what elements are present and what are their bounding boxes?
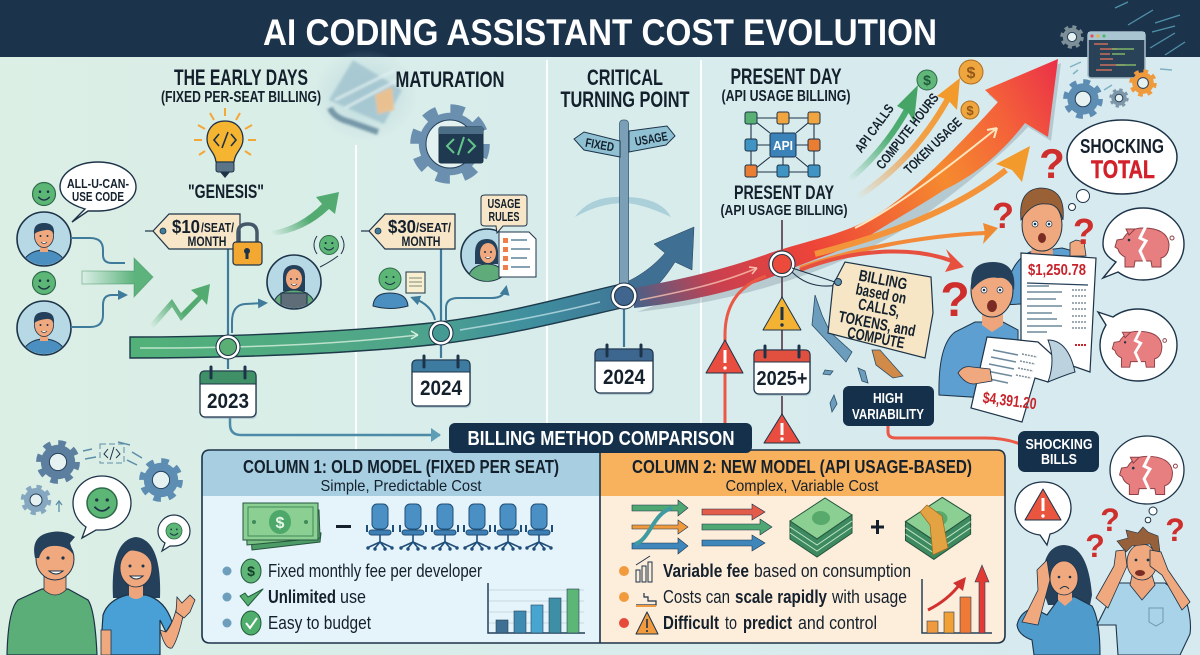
- bullet: scale rapidly: with usage: [831, 587, 907, 607]
- note: usage rules: RULES: [488, 210, 520, 224]
- bullet: unlimited use: [222, 587, 366, 607]
- bullet: scale rapidly: [619, 587, 907, 607]
- panel: billing comparison: [202, 450, 1005, 643]
- receipt: $4,391.20: $4,391.20: [982, 390, 1037, 413]
- bullet: difficult to predict: and control: [798, 613, 877, 633]
- speech bubble: broken piggy upper: [1103, 208, 1184, 280]
- connectors: developers to arrow: [71, 238, 125, 327]
- label: present day repeated: (API USAGE BILLING): [720, 202, 848, 219]
- bullet: fixed fee: $: [247, 563, 255, 579]
- node: 2025: [769, 251, 795, 277]
- red connector: [725, 276, 766, 440]
- receipt: $4,391.20: [958, 337, 1075, 422]
- arrow: maturation right: [446, 288, 506, 320]
- arrow: to woman: [232, 303, 265, 333]
- price tag: billing based on calls tokens compute: TOKENS, and: [837, 309, 917, 340]
- calendar: 2024 turning point: 2024: [603, 366, 645, 389]
- section heading: critical turning point: TURNING POINT: [560, 87, 690, 112]
- column 2: new model: COLUMN 2: NEW MODEL (API USAGE-BASED): [632, 457, 972, 477]
- bullet: fixed fee: Fixed monthly fee per developer: [268, 561, 482, 581]
- question marks: [940, 140, 1095, 327]
- section heading: the early days: [161, 65, 321, 106]
- calendar: 2025+: 2025+: [756, 368, 808, 390]
- price tag: $30 per seat: $30: [388, 217, 416, 237]
- speech bubble: all-u-can-use code: USE CODE: [72, 189, 124, 204]
- thought bubbles: [1068, 190, 1090, 210]
- icon: warning red left: [706, 340, 743, 373]
- question marks: ?: [1039, 140, 1065, 187]
- icon: cash bundle: [906, 497, 971, 559]
- node: 2024 turning point: [611, 283, 637, 309]
- person: developer bottom: [17, 301, 71, 369]
- speech bubble: broken piggy: [1110, 436, 1184, 504]
- icon: coin orange small: [961, 101, 979, 119]
- column 1: old model: COLUMN 1: OLD MODEL (FIXED PER SEAT): [243, 457, 559, 477]
- arrow: compute hours: COMPUTE HOURS: [873, 90, 942, 172]
- section heading: maturation: MATURATION: [396, 67, 504, 92]
- stem: turning point: [623, 296, 625, 347]
- person: user with document: [373, 268, 425, 308]
- torn wrapper debris: [812, 295, 903, 412]
- arrow: compute hours: [856, 78, 960, 198]
- question marks: [1085, 502, 1185, 564]
- speech bubble: all-u-can-use code: [60, 162, 136, 222]
- big red arrow: [634, 59, 1061, 312]
- bullet: difficult to predict: Difficult: [663, 613, 719, 633]
- icon: gear with code window: [416, 110, 484, 178]
- icon: coin orange small: $: [966, 103, 974, 118]
- bullet: difficult to predict: to: [725, 613, 737, 633]
- signpost: fixed vs usage: FIXED: [584, 136, 615, 154]
- icon: warning orange: [763, 297, 801, 330]
- panel outline: [202, 450, 1005, 643]
- icon: coin orange large: $: [967, 65, 976, 82]
- question marks: ?: [940, 274, 970, 327]
- section heading: present day: [722, 64, 850, 105]
- badge: high variability: [843, 386, 934, 426]
- icon: happy thought: [314, 236, 344, 267]
- person: worried woman: [1017, 545, 1100, 655]
- chart: stable cost bars: [488, 583, 585, 633]
- icon: warning red lower: [764, 414, 800, 443]
- calendar: 2024 maturation: 2024: [420, 377, 462, 400]
- column 1: old model: Simple, Predictable Cost: [320, 478, 482, 495]
- arrow: green curved: [272, 192, 339, 236]
- calendar: 2024 turning point: [595, 345, 654, 395]
- label: present day repeated: PRESENT DAY: [734, 183, 834, 204]
- heading pill: billing method comparison: BILLING METHOD COMPARISON: [468, 428, 734, 450]
- icon: smiley bottom: [32, 272, 56, 294]
- person: woman with usage rules: [461, 229, 536, 290]
- section heading: present day: PRESENT DAY: [730, 64, 842, 89]
- question marks: ?: [1165, 512, 1185, 548]
- person: man in green: [7, 532, 97, 655]
- icon: bottom-left gears and code exchange: [23, 442, 179, 513]
- calendar: 2025+: [754, 346, 811, 396]
- badge: shocking bills: BILLS: [1041, 451, 1077, 468]
- icon: padlock: [233, 224, 262, 265]
- price tag: billing based on calls tokens compute: [828, 262, 933, 358]
- arrow: green zigzag: [149, 284, 210, 329]
- question marks: ?: [992, 195, 1014, 236]
- chart: rising cost bars: [922, 565, 992, 633]
- icon: cash bills: [243, 503, 321, 550]
- receipt: $1,250.78: [1021, 240, 1096, 372]
- arrow: teal branch: [614, 227, 694, 302]
- column 2: new model: Complex, Variable Cost: [726, 478, 879, 495]
- price tag: $10 per seat: [145, 214, 240, 249]
- speech bubble: happy small: [158, 515, 190, 551]
- heading pill: billing method comparison: [449, 423, 752, 453]
- bullet: variable fee: based on consumption: [754, 561, 911, 581]
- signpost: fixed vs usage: USAGE: [634, 129, 669, 149]
- price tag: billing based on calls tokens compute: CALLS,: [857, 296, 901, 321]
- icon: api network: [745, 112, 820, 177]
- icon: api network: API: [773, 138, 793, 153]
- section heading: present day: (API USAGE BILLING): [722, 88, 850, 105]
- node: 2024 maturation: [429, 321, 453, 345]
- icon: coin green: $: [923, 72, 931, 88]
- question marks: ?: [1073, 211, 1095, 252]
- price tag: billing based on calls tokens compute: based on: [854, 281, 908, 308]
- bullet: scale rapidly: Costs can: [663, 587, 730, 607]
- calendar: 2024 maturation: [412, 356, 471, 408]
- speech bubble: shocking total: TOTAL: [1091, 156, 1155, 184]
- price tag: $10 per seat: $10: [172, 217, 200, 237]
- label: genesis: "GENESIS": [188, 182, 264, 203]
- bullet: easy to budget: [222, 611, 371, 635]
- icon: smiley top: [32, 182, 56, 206]
- badge: shocking bills: SHOCKING: [1026, 436, 1092, 453]
- icon: coin orange large: [959, 60, 983, 84]
- node: 2023: [216, 335, 240, 359]
- icon: crossing arrows: [632, 500, 688, 554]
- bullet: fixed fee: [222, 559, 482, 583]
- price tag: billing based on calls tokens compute: BILLING: [857, 268, 909, 294]
- person: stressed man: [1096, 527, 1190, 655]
- note: usage rules: [481, 195, 527, 233]
- calendar: 2023: [200, 367, 257, 419]
- speech bubble: shocking total: SHOCKING: [1080, 136, 1164, 158]
- top-right icon cluster: [1062, 2, 1185, 116]
- person: woman on laptop: [267, 255, 321, 318]
- section heading: critical turning point: [560, 65, 690, 112]
- speech bubble: warning: [1015, 482, 1071, 545]
- stem: present day: [781, 220, 783, 415]
- icon: cash stack: [790, 498, 852, 557]
- speech bubble: shocking total: [1067, 120, 1177, 194]
- note: usage rules: USAGE: [488, 197, 520, 211]
- person: shocked man holding bill: [1003, 188, 1090, 305]
- label: present day repeated: [720, 183, 848, 219]
- operator: [336, 525, 351, 528]
- stems: [228, 249, 441, 369]
- speech bubble: all-u-can-use code: ALL-U-CAN-: [67, 176, 129, 191]
- bullet: difficult to predict: [619, 612, 877, 634]
- badge: shocking bills: [1018, 431, 1099, 472]
- arrow: api calls: [849, 85, 918, 180]
- person: developer top: [17, 212, 71, 280]
- bullet: scale rapidly: scale rapidly: [735, 587, 827, 607]
- question marks: ?: [1085, 528, 1105, 564]
- bullet: variable fee: Variable fee: [663, 561, 749, 581]
- calendar: 2023: 2023: [207, 390, 249, 413]
- badge: high variability: VARIABILITY: [852, 407, 924, 423]
- section heading: the early days: THE EARLY DAYS: [174, 65, 308, 90]
- bullet: variable fee: [619, 556, 911, 582]
- icon: coin green: [917, 70, 937, 90]
- arrow: maturation left: [413, 298, 435, 320]
- column 2: new model: [600, 450, 1005, 643]
- arrow: usage orange upper: [815, 146, 1030, 254]
- title bar: [0, 0, 1200, 57]
- section heading: the early days: (FIXED PER-SEAT BILLING): [161, 89, 321, 106]
- icon: six chairs: [366, 504, 553, 551]
- illustration: conveyor belt: [313, 49, 417, 141]
- label: token usage: TOKEN USAGE: [901, 115, 965, 177]
- question marks: ?: [1100, 502, 1120, 538]
- arrow: green flow: [82, 258, 153, 297]
- price tag: $30 per seat: MONTH: [402, 234, 440, 249]
- tag string: [792, 268, 838, 286]
- column 1: old model: [202, 450, 600, 643]
- badge: high variability: HIGH: [873, 391, 903, 407]
- arrow: usage orange lower: [800, 223, 998, 268]
- speech bubble: broken piggy lower: [1098, 309, 1177, 381]
- price tag: $30 per seat: /SEAT/: [416, 220, 451, 235]
- person: woman in blue: [101, 537, 195, 655]
- price tag: billing based on calls tokens compute: COMPUTE: [846, 325, 906, 353]
- price tag: $30 per seat: [361, 214, 455, 249]
- icon: cash bills: $: [276, 515, 285, 532]
- icon: light bulb genesis: [194, 108, 256, 178]
- price tag: $10 per seat: /SEAT/: [201, 220, 234, 235]
- timeline band: [130, 282, 630, 358]
- bullet: unlimited use: Unlimited: [268, 587, 336, 607]
- arrow: usage red: [800, 249, 964, 272]
- price tag: $10 per seat: MONTH: [188, 234, 226, 249]
- bullet: unlimited use: use: [340, 587, 366, 607]
- thought bubbles: [1145, 507, 1157, 523]
- bullet: easy to budget: Easy to budget: [268, 613, 371, 633]
- speech bubble: happy large: [73, 476, 131, 538]
- bullet: difficult to predict: predict: [743, 613, 792, 633]
- person: shocked man with long bill: [939, 262, 1018, 400]
- arrow: api calls: API CALLS: [852, 101, 897, 155]
- receipt: $1,250.78: $1,250.78: [1028, 262, 1086, 279]
- arrowhead: [431, 428, 441, 442]
- connector: high variability to shocking bills: [888, 426, 1020, 444]
- section heading: critical turning point: CRITICAL: [587, 65, 663, 90]
- operator: [871, 520, 884, 534]
- signpost: fixed vs usage: [574, 120, 675, 292]
- title: AI CODING ASSISTANT COST EVOLUTION: [263, 12, 937, 53]
- connector: to billing comparison: [230, 418, 440, 435]
- icon: usage arrows: [702, 504, 772, 551]
